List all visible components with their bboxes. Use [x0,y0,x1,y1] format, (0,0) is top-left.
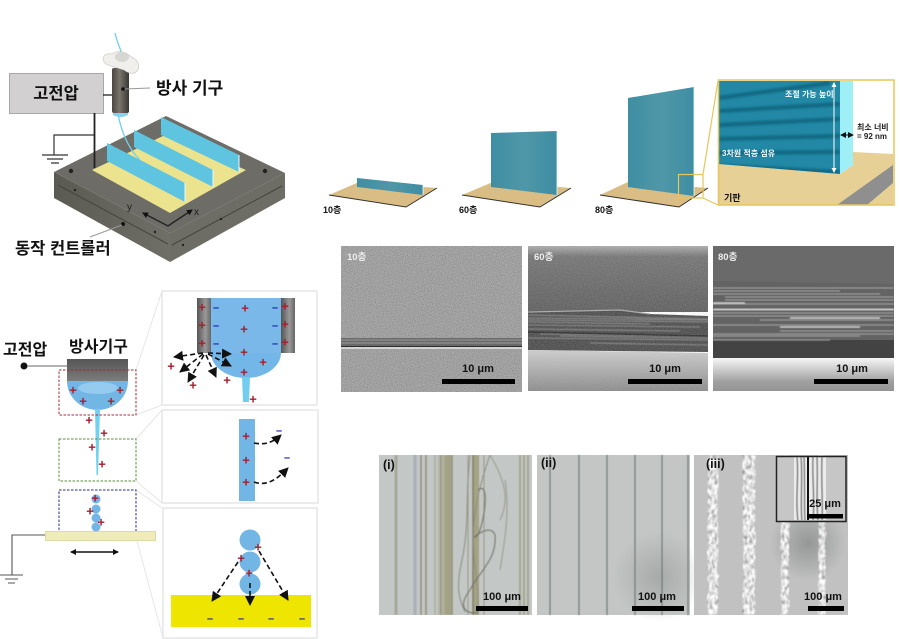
nozzle and droplet [67,359,128,475]
panel: jet detail [162,410,318,503]
panel: SEM images [341,246,894,392]
wall: 60 layers [459,131,571,215]
panel: optical microscope images [379,455,848,622]
ground wiring [42,135,94,163]
panel: jet detail: + [242,428,250,444]
callout: wall detail: 기판 [724,192,741,203]
substrate plate [92,135,246,213]
panel: deposition detail: + [237,550,245,566]
panel: stacked wall renderings [323,80,894,215]
panel: nozzle detail: + [281,334,289,350]
panel: nozzle detail: + [240,364,248,380]
charges: + [86,504,94,518]
high voltage box: 고전압 [33,84,79,103]
panel: nozzle detail: + [198,300,206,314]
charges: + [100,426,108,440]
panel: deposition detail: – [268,613,274,625]
panel: nozzle detail: – [272,338,278,350]
wall: 10 layers: 10층 [323,205,341,215]
SEM: 10 layers [341,246,522,392]
micrograph (iii): (iii) [706,457,725,471]
inset magnification: 25 μm [809,498,841,510]
callout: wall detail: 최소 너비 [857,122,889,132]
panel: nozzle detail: + [198,336,206,350]
label: high voltage: 고전압 [3,341,47,359]
charges: + [69,382,77,398]
SEM: 60 layers [528,246,708,392]
SEM: 60 layers: 60층 [534,252,554,263]
panel: nozzle detail: + [223,372,231,388]
panel: nozzle detail: + [167,358,175,374]
panel: electrospinning schematic [0,291,318,638]
callout: wall detail: = 92 nm [857,132,887,141]
panel: deposition detail: + [245,566,253,580]
callout: wall detail [718,80,894,205]
charges [69,382,124,530]
charges: + [98,456,106,472]
stage motion arrow [71,551,118,553]
panel: nozzle detail: + [281,298,289,314]
panel: nozzle detail: – [213,338,219,350]
xy axis arrows [127,202,199,226]
panel: jet detail: + [242,474,250,490]
wall: 80 layers [595,87,708,215]
micrograph (iii) [694,455,848,615]
charges: + [97,514,105,530]
substrate and ground [0,532,156,583]
label: nozzle: 방사기구 [69,338,128,356]
panel: nozzle detail: + [281,316,289,332]
callout zoom lines [678,81,718,205]
panel: deposition detail: + [254,540,262,554]
panel: nozzle detail: – [272,302,278,314]
charges: + [91,490,99,506]
SEM: 80 layers [713,246,894,392]
panel: deposition detail: – [207,613,213,625]
panel: nozzle detail: + [259,354,267,370]
panel: deposition detail: – [299,613,305,625]
high voltage box [10,74,104,114]
panel: jet detail: – [284,452,290,464]
micrograph (i) [379,455,532,615]
zoom guide lines [136,291,163,638]
label: motion controller [15,225,122,258]
charges: + [85,412,93,428]
micrograph (i): 100 μm [483,591,521,603]
panel: nozzle detail: + [189,378,197,392]
callout: wall detail: 조절 가능 높이 [785,89,834,99]
panel: jet detail: – [276,425,282,437]
xy axis arrows: y [127,202,132,213]
SEM: 10 layers: 10층 [347,252,367,263]
inset magnification [776,456,846,522]
micrograph (ii): (ii) [541,456,556,470]
panel: nozzle detail: – [213,302,219,314]
droplets [92,494,100,532]
xy axis arrows: x [194,207,199,218]
SEM: 80 layers: 80층 [718,252,738,263]
SEM: 10 layers: 10 μm [462,363,494,375]
micrograph (iii): 100 μm [804,591,842,603]
panel: jet detail: + [242,452,250,468]
wall: 80 layers: 80층 [595,205,613,215]
panel: nozzle detail: + [240,344,248,360]
label: nozzle: 방사 기구 [156,79,223,98]
panel: nozzle detail: – [272,320,278,332]
wires [94,95,112,168]
SEM: 80 layers: 10 μm [836,363,868,375]
panel: nozzle detail [162,291,317,406]
charges: + [107,394,115,408]
wall: 60 layers: 60층 [459,205,477,215]
dashed zoom boxes [59,370,136,537]
label: motion controller: 동작 컨트롤러 [15,239,111,258]
micrograph (i): (i) [383,458,395,472]
panel: nozzle detail: + [241,300,249,316]
panel: deposition detail [163,508,317,638]
jet and feed thread [115,33,140,160]
charges: + [79,394,87,408]
charges: + [88,440,96,454]
SEM: 60 layers: 10 μm [649,363,681,375]
wall: 10 layers [323,178,437,215]
label: nozzle [125,79,223,98]
micrograph (ii) [537,455,703,622]
charges: + [116,382,124,398]
panel: nozzle detail: + [249,392,257,406]
stacked walls [107,117,239,202]
panel: nozzle detail: + [240,322,248,336]
panel: deposition detail: – [238,613,244,625]
panel: nozzle detail: – [213,320,219,332]
panel: nozzle detail: + [198,318,206,332]
micrograph (ii): 100 μm [638,591,676,603]
label: high voltage [3,341,67,370]
panel: printer setup illustration [10,33,285,262]
callout: wall detail: 3차원 적층 섬유 [722,148,776,158]
stage platform [54,116,285,262]
nozzle [103,52,139,117]
